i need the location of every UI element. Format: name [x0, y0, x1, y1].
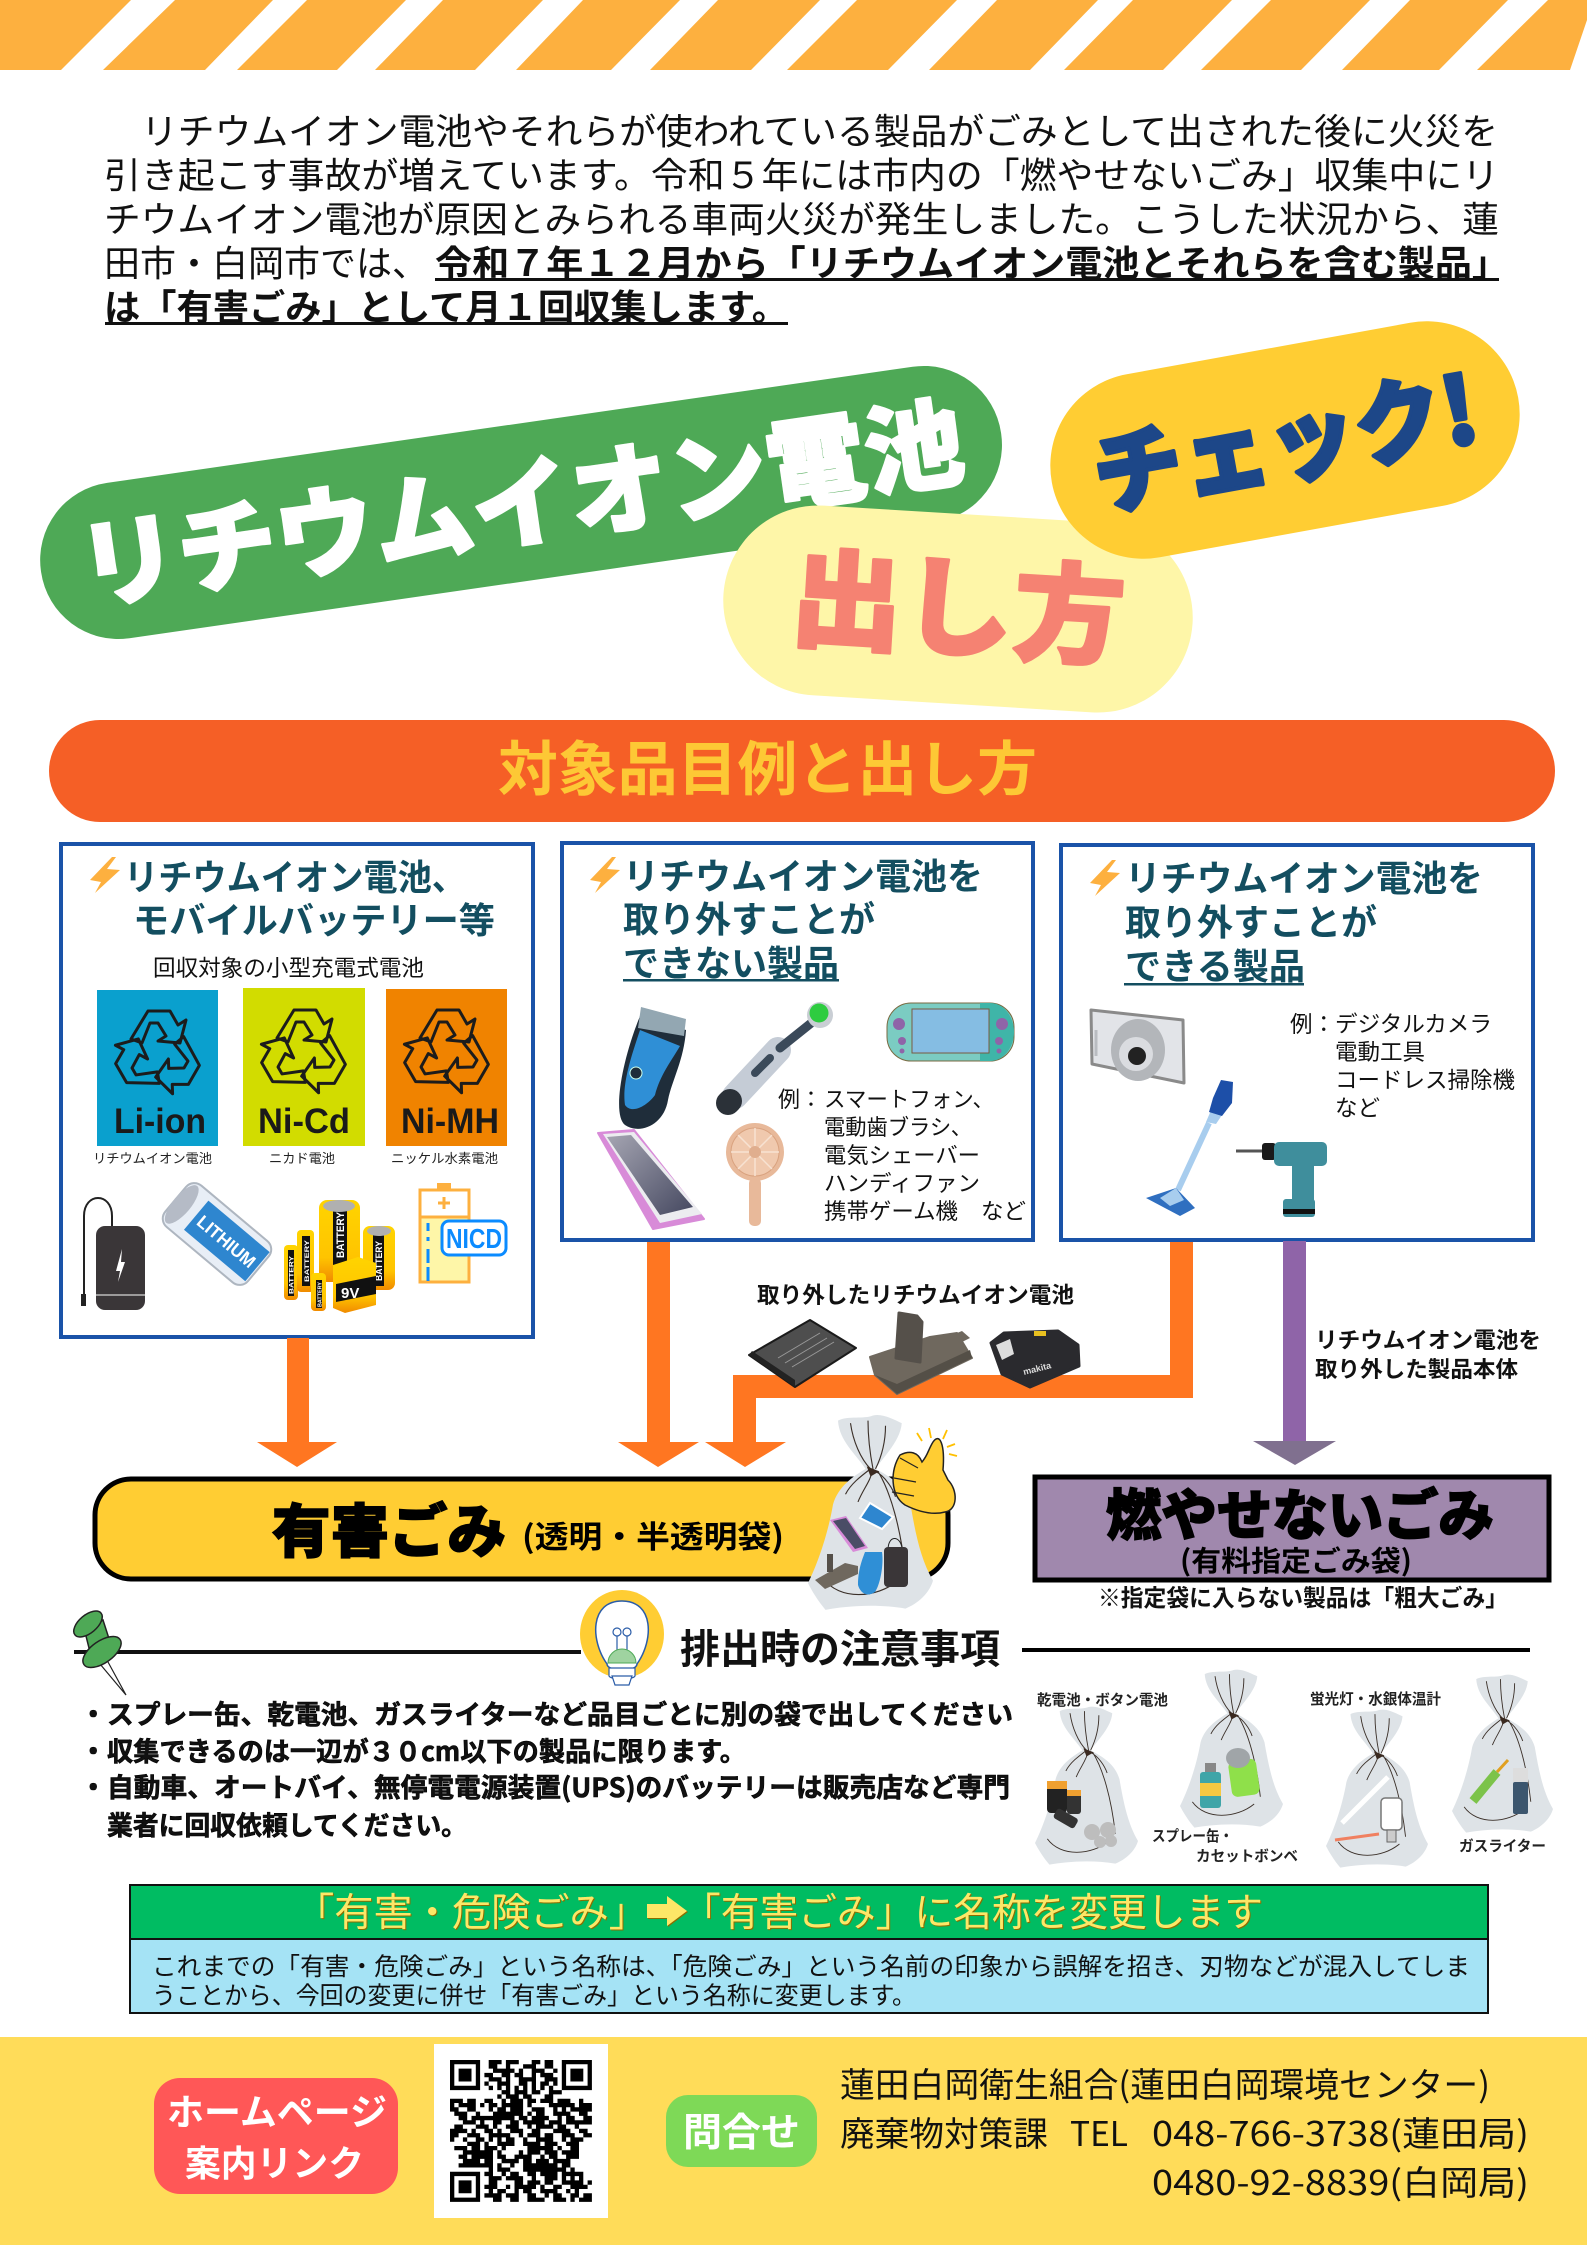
- section banner: [49, 720, 1555, 822]
- homepage link button: [154, 2078, 398, 2194]
- icon: mobile battery: [81, 1198, 145, 1310]
- icon: removed phone battery: [749, 1320, 856, 1387]
- panel 2 examples: など: [981, 1194, 1026, 1226]
- precautions list: 業者に回収依頼してください。: [107, 1804, 467, 1843]
- icon: dry cells: BATTERY: [304, 1239, 311, 1282]
- icon: dry cells: [284, 1200, 395, 1313]
- tile captions: ニカド電池: [269, 1148, 335, 1167]
- icon: dry cells: 9V: [341, 1285, 359, 1302]
- rename notice: [130, 1882, 1488, 2013]
- title pill: check: [1035, 306, 1535, 574]
- panel 3 heading: 取り外すことが: [1125, 894, 1377, 946]
- panel 2 examples: 携帯ゲーム機: [824, 1194, 958, 1226]
- panel 3 examples: コードレス掃除機: [1335, 1063, 1515, 1095]
- panel 3 examples: など: [1335, 1091, 1380, 1123]
- panel 1 heading: モバイルバッテリー等: [133, 892, 495, 944]
- recycling marks subtitle: 回収対象の小型充電式電池: [153, 951, 424, 983]
- bag: spray cans: [1180, 1670, 1283, 1828]
- icon: handheld game: [887, 1003, 1014, 1061]
- contact details: TEL: [1070, 2107, 1128, 2156]
- label: spray cans: スプレー缶・: [1152, 1825, 1233, 1846]
- notes heading rule and title: [74, 1617, 1530, 1675]
- icon: lithium battery: LITHIUM: [193, 1212, 259, 1272]
- panel 3 heading: [1124, 850, 1483, 990]
- title pill: how to dispose: 出し方: [787, 513, 1130, 689]
- arrow: removed batteries to hazardous: [705, 1242, 1193, 1467]
- icon: shaver: [619, 1007, 686, 1129]
- title pill: lithium ion battery: リチウムイオン電池: [69, 364, 972, 632]
- icon: dry cells: BATTERY: [290, 1256, 296, 1294]
- tile: Li-ion: [97, 990, 218, 1146]
- rename notice: 「有害・危険ごみ」: [295, 1882, 648, 1938]
- panel: products with removable battery: [1061, 845, 1533, 1240]
- panel: batteries: [61, 844, 533, 1337]
- icon: removed tool battery: [991, 1331, 1079, 1387]
- panel 3 examples: 電動工具: [1335, 1035, 1425, 1067]
- label: removed batteries: 取り外したリチウムイオン電池: [757, 1277, 1074, 1310]
- precautions list: スプレー缶、乾電池、ガスライターなど品目ごとに別の袋で出してください: [107, 1693, 1013, 1732]
- intro paragraph: 引き起こす事故が増えています。令和５年には市内の「燃やせないごみ」収集中にリ: [104, 147, 1499, 199]
- contact label button: 問合せ: [683, 2102, 800, 2158]
- panel: products with non-removable battery: [562, 843, 1033, 1240]
- panel 2 heading: できない製品: [623, 935, 839, 987]
- arrow: product body to non-burnable: [1253, 1241, 1336, 1465]
- panel 2 heading: 取り外すことが: [623, 891, 875, 943]
- label: gas lighter: ガスライター: [1459, 1835, 1546, 1856]
- tile: Ni-Cd: Ni-Cd: [258, 1102, 350, 1141]
- icon: cordless vacuum: [1146, 1080, 1233, 1216]
- intro paragraph: は「有害ごみ」として月１回収集します。: [104, 279, 788, 331]
- notes heading rule and title: 排出時の注意事項: [680, 1617, 1000, 1675]
- icon: smartphone: [598, 1130, 704, 1229]
- tile captions: リチウムイオン電池: [93, 1148, 212, 1167]
- panel 3 examples: [1290, 1007, 1515, 1123]
- icon: removed tool battery: makita: [1022, 1360, 1053, 1377]
- tile: Ni-Cd: [243, 988, 365, 1146]
- icon: digital camera: [1091, 1010, 1184, 1083]
- bin: non-burnable waste: [1035, 1471, 1549, 1580]
- note: oversized: ※指定袋に入らない製品は「粗大ごみ」: [1098, 1579, 1508, 1613]
- intro paragraph: 令和７年１２月から「リチウムイオン電池とそれらを含む製品」: [435, 235, 1509, 287]
- bag: dry cells and button cells: [1035, 1689, 1168, 1865]
- icon: dry cells: BATTERY: [318, 1282, 324, 1307]
- icon: removed vacuum battery: [870, 1313, 972, 1394]
- contact details: 048-766-3738(蓮田局): [1152, 2107, 1529, 2156]
- label: product body: [1315, 1323, 1541, 1384]
- icon: lightning: [1090, 860, 1120, 896]
- icon: pushpin: [69, 1606, 126, 1695]
- icon: NICD battery: NICD: [446, 1223, 502, 1254]
- label: product body: 取り外した製品本体: [1315, 1352, 1519, 1384]
- arrow: panel 2 to hazardous: [618, 1242, 699, 1467]
- label: product body: リチウムイオン電池を: [1315, 1323, 1541, 1355]
- panel 3 heading: できる製品: [1125, 938, 1305, 990]
- homepage link button: 案内リンク: [185, 2135, 364, 2187]
- tile: Ni-MH: [386, 989, 507, 1146]
- tile: Ni-MH: Ni-MH: [401, 1102, 499, 1141]
- bin: hazardous waste: (透明・半透明袋): [522, 1512, 784, 1557]
- precautions list: 収集できるのは一辺が３０cm以下の製品に限ります。: [107, 1730, 746, 1769]
- contact details: [840, 2058, 1529, 2205]
- label: spray cans: [1152, 1825, 1298, 1866]
- panel 3 examples: 例：: [1290, 1007, 1335, 1039]
- label: spray cans: カセットボンベ: [1196, 1845, 1298, 1866]
- tile captions: [93, 1148, 498, 1167]
- panel 2 examples: スマートフォン、: [824, 1082, 994, 1114]
- icon: lightning: [590, 857, 620, 893]
- homepage link button: ホームページ: [167, 2083, 387, 2136]
- title pill: check: チェック!: [1082, 336, 1487, 537]
- bin: hazardous waste: 有害ごみ: [272, 1485, 506, 1569]
- panel 2 examples: ハンディファン: [824, 1166, 980, 1198]
- icon: handy fan: [726, 1123, 784, 1226]
- icon: power drill: [1236, 1142, 1327, 1217]
- striped header band: [0, 0, 1587, 70]
- intro paragraph: 田市・白岡市では、: [104, 235, 428, 287]
- icon: lithium battery: [158, 1178, 276, 1289]
- bin: hazardous waste: [95, 1479, 948, 1579]
- intro paragraph: リチウムイオン電池やそれらが使われている製品がごみとして出された後に火災を: [141, 103, 1498, 155]
- precautions list: [80, 1693, 1013, 1843]
- panel 2 examples: 電動歯ブラシ、: [824, 1110, 972, 1142]
- panel 2 examples: 例：: [778, 1082, 822, 1114]
- panel 1 heading: [124, 849, 495, 944]
- contact label button: [666, 2095, 817, 2167]
- panel 2 examples: [778, 1082, 1026, 1226]
- rename notice: うことから、今回の変更に併せ「有害ごみ」という名称に変更します。: [152, 1977, 916, 2012]
- contact details: 0480-92-8839(白岡局): [1152, 2156, 1529, 2205]
- bag: fluorescent and thermometer: [1310, 1688, 1441, 1868]
- rename notice: 「有害ごみ」に名称を変更します: [682, 1882, 1263, 1938]
- panel 1 heading: リチウムイオン電池、: [124, 849, 466, 901]
- panel 3 heading: リチウムイオン電池を: [1125, 850, 1483, 902]
- rename notice: これまでの「有害・危険ごみ」という名称は、「危険ごみ」という名前の印象から誤解を招き、刃物などが混入してしま: [152, 1948, 1470, 1983]
- icon: lightning: [90, 857, 120, 893]
- icon: dry cells: BATTERY: [335, 1211, 347, 1258]
- precautions list: ・: [80, 1766, 106, 1805]
- bin: non-burnable waste: 燃やせないごみ: [1106, 1471, 1494, 1551]
- precautions list: ・: [80, 1730, 106, 1769]
- panel 2 heading: リチウムイオン電池を: [623, 848, 983, 900]
- tile captions: ニッケル水素電池: [391, 1148, 498, 1167]
- bag: dry cells and button cells: 乾電池・ボタン電池: [1037, 1689, 1168, 1710]
- intro paragraph: チウムイオン電池が原因とみられる車両火災が発生しました。こうした状況から、蓮: [104, 191, 1499, 243]
- panel 3 examples: デジタルカメラ: [1335, 1007, 1492, 1039]
- footer band: [0, 2037, 1587, 2245]
- panel 2 heading: [623, 848, 983, 987]
- bin: non-burnable waste: (有料指定ごみ袋): [1180, 1539, 1412, 1580]
- precautions list: ・: [80, 1693, 106, 1732]
- icon: electric toothbrush: [728, 1002, 833, 1103]
- tile: Li-ion: Li-ion: [114, 1102, 206, 1141]
- intro paragraph: [104, 103, 1509, 331]
- section banner: 対象品目例と出し方: [498, 722, 1037, 807]
- contact details: 廃棄物対策課: [840, 2107, 1048, 2156]
- arrow: panel 1 to hazardous: [257, 1338, 337, 1467]
- bag: gas lighters: [1452, 1675, 1553, 1833]
- bag: fluorescent and thermometer: 蛍光灯・水銀体温計: [1310, 1688, 1441, 1709]
- precautions list: 自動車、オートバイ、無停電電源装置(UPS)のバッテリーは販売店など専門: [107, 1766, 1010, 1805]
- icon: NICD battery: [420, 1183, 506, 1282]
- QR code: [434, 2044, 608, 2218]
- title pill: how to dispose: [718, 500, 1198, 718]
- panel 2 examples: 電気シェーバー: [824, 1138, 980, 1170]
- icon: dry cells: BATTERY: [374, 1241, 384, 1281]
- contact details: 蓮田白岡衛生組合(蓮田白岡環境センター): [840, 2058, 1490, 2107]
- illustration: filled bag with thumbs up: [808, 1415, 957, 1610]
- icon: light bulb: [580, 1590, 664, 1685]
